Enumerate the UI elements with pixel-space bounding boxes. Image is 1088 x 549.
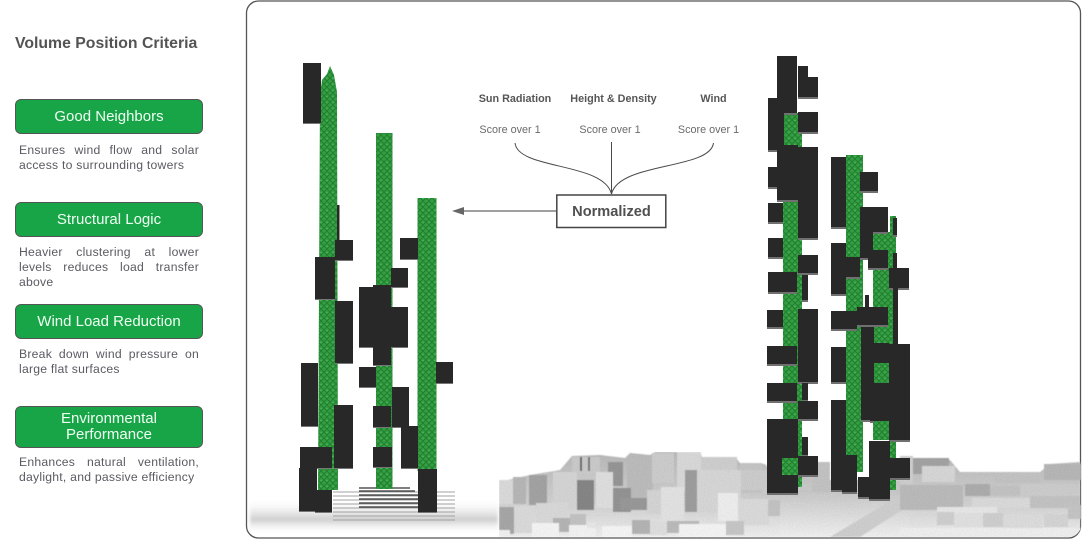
title: Volume Position Criteria — [15, 35, 197, 52]
text: good neighbors description: access to surrounding towers — [19, 158, 184, 172]
text: wind load reduction description: large flat surfaces — [19, 362, 120, 376]
text: structural logic description: levels reduces load transfer — [19, 260, 199, 274]
city: background mass — [499, 452, 1080, 537]
panel frame — [246, 1, 1080, 538]
button: wind load reduction — [15, 304, 203, 339]
panel: tower massing illustration — [246, 0, 1082, 539]
text: structural logic description: Heavier clustering at lower — [19, 245, 199, 259]
button: environmental performance: Performance — [66, 426, 152, 443]
text: environmental performance description: daylight, and passive efficiency — [19, 470, 194, 484]
button: environmental performance: Environmental — [61, 410, 157, 427]
box: normalized — [557, 195, 666, 228]
city: left blocks — [499, 452, 780, 537]
text: wind load reduction description — [19, 347, 199, 376]
right tower greenery — [783, 113, 896, 490]
right tower green patches — [782, 363, 889, 475]
button: structural logic: Structural Logic — [57, 210, 161, 228]
city: right ground and road — [831, 510, 899, 537]
left tower greenery — [318, 66, 436, 490]
text: environmental performance description — [19, 455, 199, 484]
heading: height and density: Height & Density — [570, 93, 657, 105]
button: good neighbors: Good Neighbors — [54, 108, 164, 124]
city model — [250, 452, 1081, 537]
score: height and density: Score over 1 — [579, 124, 641, 136]
heading: wind: Wind — [700, 93, 727, 105]
text: good neighbors description — [19, 143, 199, 172]
button: wind load reduction: Wind Load Reduction — [37, 312, 181, 330]
heading: sun radiation: Sun Radiation — [479, 93, 551, 105]
arrow: to left towers — [452, 207, 556, 215]
score: wind: Score over 1 — [678, 124, 739, 136]
left ground shadow — [248, 507, 499, 528]
connector curves — [515, 142, 714, 194]
right tower massing blocks — [767, 56, 910, 499]
score: sun radiation: Score over 1 — [479, 124, 541, 136]
left tower massing blocks — [299, 63, 453, 512]
text: structural logic description: above — [19, 275, 53, 289]
towers: left group — [299, 63, 453, 512]
button: structural logic — [15, 202, 203, 237]
text: wind load reduction description: Break down wind pressure on — [19, 347, 199, 361]
text: structural logic description — [19, 245, 199, 289]
box: normalized: Normalized — [572, 204, 651, 220]
city: right blocks — [812, 456, 1081, 537]
button: good neighbors — [15, 99, 203, 134]
button: environmental performance — [15, 406, 203, 448]
text: environmental performance description: Enhances natural ventilation, — [19, 455, 199, 469]
base floor slabs — [333, 492, 455, 520]
towers: right group — [767, 56, 910, 499]
text: good neighbors description: Ensures wind flow and solar — [19, 143, 199, 157]
diagram: normalization criteria — [452, 93, 739, 228]
